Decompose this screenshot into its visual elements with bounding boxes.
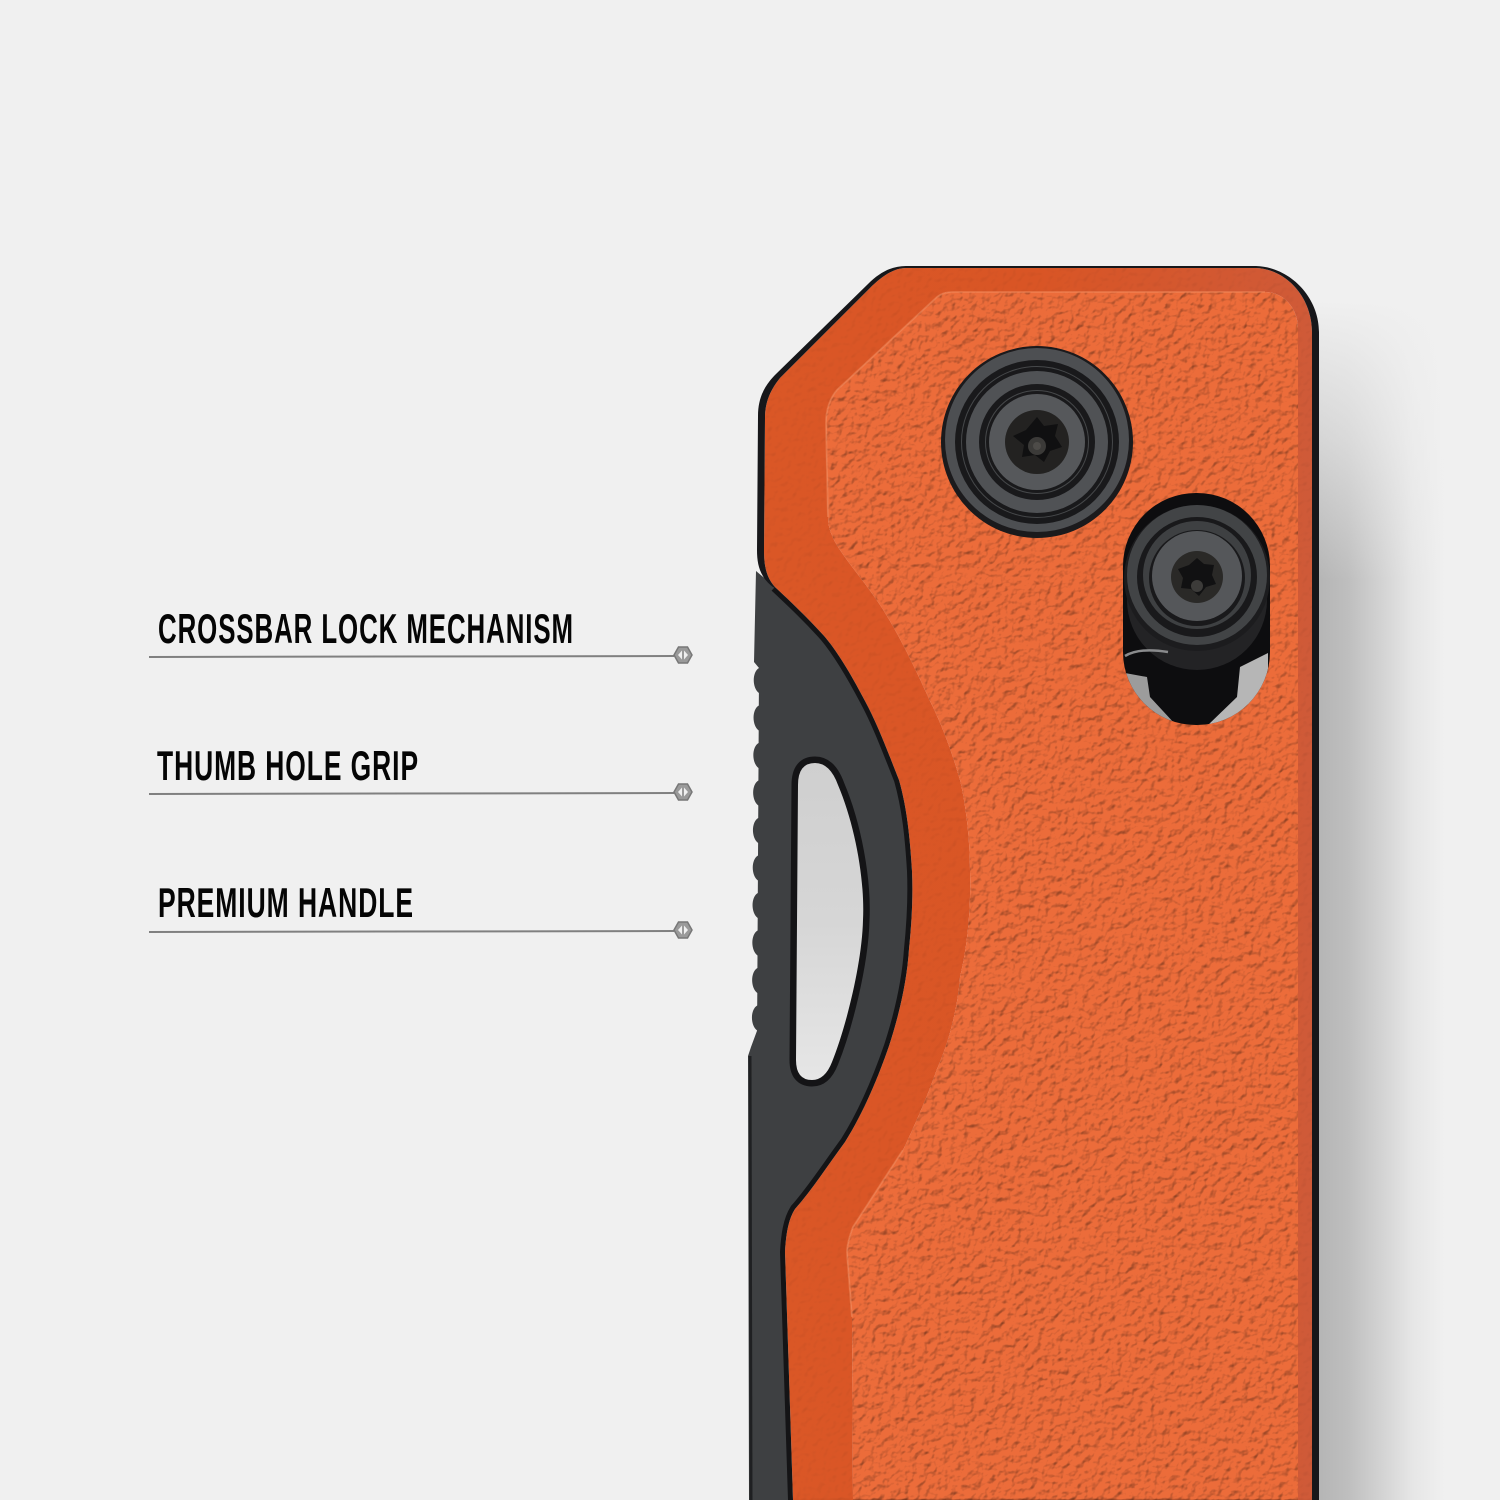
textured handle face [826, 292, 1298, 1500]
orange handle scale bezel [764, 268, 1312, 1500]
torx socket [1013, 417, 1062, 462]
black liner outline [757, 266, 1319, 1500]
blade body with jimping [748, 571, 912, 1500]
callout: thumb hole grip [149, 742, 692, 800]
blade with thumb hole [748, 571, 912, 1500]
steel reflection left [1126, 673, 1172, 721]
steel reflection right [1208, 653, 1268, 725]
thumb stud slot [1123, 493, 1270, 725]
label: PREMIUM HANDLE [158, 879, 414, 926]
callout: crossbar lock mechanism [149, 605, 692, 663]
label: THUMB HOLE GRIP [157, 742, 419, 789]
pivot screw [941, 346, 1133, 538]
knife drop shadow [1315, 300, 1445, 1500]
liner edge along finger choil [775, 587, 912, 1500]
stud base [1127, 600, 1267, 670]
hex marker [674, 784, 692, 800]
knife illustration [748, 266, 1319, 1500]
callout: premium handle [149, 879, 692, 938]
hex marker [674, 647, 692, 663]
leader line [149, 656, 674, 657]
leader line [149, 793, 674, 794]
leader line [149, 931, 674, 932]
thumb hole [796, 763, 863, 1080]
thumb stud head [1124, 505, 1270, 651]
lock spring wire [1125, 650, 1168, 656]
blade left edge shading [750, 1056, 751, 1500]
label: CROSSBAR LOCK MECHANISM [158, 605, 574, 652]
handle face edge highlight [826, 292, 1265, 1317]
hex marker [674, 922, 692, 938]
